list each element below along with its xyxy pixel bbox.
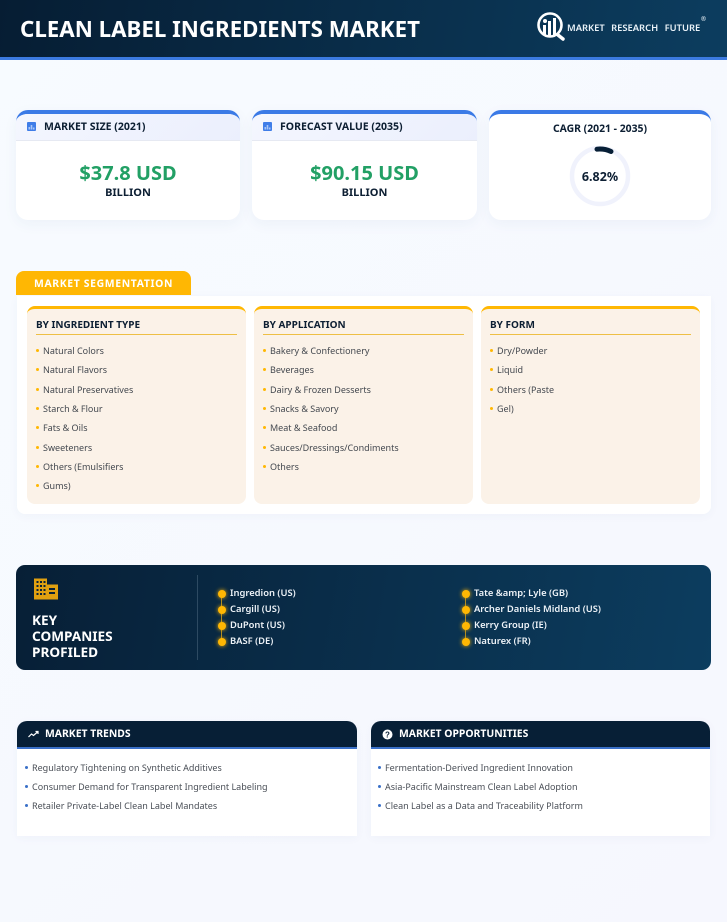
companies column 2: Kerry Group (IE) bbox=[474, 618, 547, 631]
heading: market segmentation tab: MARKET SEGMENTATION bbox=[34, 277, 173, 291]
segment heading: BY APPLICATION bbox=[263, 317, 346, 331]
segment list: Gel) bbox=[497, 402, 514, 415]
heading: KEY bbox=[32, 610, 57, 629]
value: $90.15 USD bbox=[310, 159, 419, 186]
trend list bbox=[25, 761, 268, 812]
segment: by ingredient type bbox=[27, 306, 246, 504]
trend list: Regulatory Tightening on Synthetic Additives bbox=[32, 761, 222, 774]
logo text: MARKET RESEARCH FUTURE bbox=[567, 21, 700, 34]
segment list: Meat & Seafood bbox=[270, 421, 337, 434]
segment list: Sweeteners bbox=[43, 441, 92, 454]
heading: PROFILED bbox=[32, 642, 98, 661]
panel title: MARKET TRENDS bbox=[45, 727, 131, 741]
segment heading: BY INGREDIENT TYPE bbox=[36, 317, 140, 331]
companies column 1 bbox=[214, 586, 296, 650]
segment list: Beverages bbox=[270, 363, 314, 376]
icon: chart bbox=[263, 122, 272, 131]
header band bbox=[0, 0, 727, 60]
segment list: Others (Emulsifiers bbox=[43, 460, 123, 473]
unit: BILLION bbox=[342, 185, 387, 200]
card title: CAGR (2021 - 2035) bbox=[553, 122, 647, 136]
logo bbox=[537, 12, 706, 41]
card header bbox=[252, 114, 477, 141]
segment list: Natural Preservatives bbox=[43, 383, 133, 396]
registered mark: ® bbox=[701, 15, 706, 23]
segment list bbox=[36, 344, 133, 492]
opportunity list bbox=[378, 761, 583, 812]
card: market size bbox=[16, 110, 240, 220]
panel: market trends bbox=[17, 721, 357, 836]
icon: question circle bbox=[382, 730, 392, 740]
opportunity list: Asia-Pacific Mainstream Clean Label Adoption bbox=[385, 780, 578, 793]
companies column 1: Cargill (US) bbox=[230, 602, 280, 615]
companies column 2: Tate &amp; Lyle (GB) bbox=[474, 586, 568, 599]
icon: question circle: ? bbox=[385, 730, 390, 740]
segment list: Dairy & Frozen Desserts bbox=[270, 383, 371, 396]
opportunity list: Clean Label as a Data and Traceability Platform bbox=[385, 799, 583, 812]
icon: buildings bbox=[34, 578, 58, 600]
heading: market segmentation tab bbox=[16, 271, 191, 295]
segment heading: BY FORM bbox=[490, 317, 535, 331]
companies column 1: DuPont (US) bbox=[230, 618, 285, 631]
title: CLEAN LABEL INGREDIENTS MARKET bbox=[20, 13, 420, 44]
panel: market segmentation bbox=[17, 296, 711, 514]
icon: trend line bbox=[28, 730, 39, 738]
segment list: Bakery & Confectionery bbox=[270, 344, 370, 357]
segment: by application bbox=[254, 306, 473, 504]
segment list: Natural Colors bbox=[43, 344, 104, 357]
panel header bbox=[371, 721, 710, 749]
segment list: Natural Flavors bbox=[43, 363, 107, 376]
segment list: Others bbox=[270, 460, 299, 473]
companies column 2: Naturex (FR) bbox=[474, 634, 531, 647]
card: CAGR bbox=[489, 110, 711, 220]
panel: key companies bbox=[16, 565, 711, 670]
heading: COMPANIES bbox=[32, 626, 113, 645]
segment list: Gums) bbox=[43, 479, 71, 492]
trend list: Consumer Demand for Transparent Ingredient Labeling bbox=[32, 780, 268, 793]
opportunity list: Fermentation-Derived Ingredient Innovation bbox=[385, 761, 573, 774]
segment list: Fats & Oils bbox=[43, 421, 88, 434]
segment list: Starch & Flour bbox=[43, 402, 103, 415]
icon: chart bbox=[27, 122, 36, 131]
segment list bbox=[490, 344, 554, 415]
segment list: Snacks & Savory bbox=[270, 402, 339, 415]
panel header bbox=[17, 721, 357, 749]
donut gauge bbox=[570, 146, 630, 206]
segment list: Liquid bbox=[497, 363, 523, 376]
icon: magnifier with bars bbox=[537, 12, 565, 41]
heading bbox=[32, 610, 113, 661]
segment list: Others (Paste bbox=[497, 383, 554, 396]
companies column 1: BASF (DE) bbox=[230, 634, 273, 647]
panel: market opportunities bbox=[371, 721, 710, 836]
segment list: Dry/Powder bbox=[497, 344, 547, 357]
companies column 2: Archer Daniels Midland (US) bbox=[474, 602, 601, 615]
segment: by form bbox=[481, 306, 700, 504]
card title: MARKET SIZE (2021) bbox=[44, 120, 145, 134]
card: forecast value bbox=[252, 110, 477, 220]
trend list: Retailer Private-Label Clean Label Mandates bbox=[32, 799, 217, 812]
companies column 1: Ingredion (US) bbox=[230, 586, 296, 599]
segment list: Sauces/Dressings/Condiments bbox=[270, 441, 399, 454]
segment list bbox=[263, 344, 399, 473]
card header bbox=[16, 114, 240, 141]
CAGR value: 6.82% bbox=[582, 168, 618, 185]
panel title: MARKET OPPORTUNITIES bbox=[399, 727, 528, 741]
unit: BILLION bbox=[105, 185, 151, 200]
card title: FORECAST VALUE (2035) bbox=[280, 120, 403, 134]
companies column 2 bbox=[458, 586, 601, 650]
value: $37.8 USD bbox=[79, 159, 177, 186]
